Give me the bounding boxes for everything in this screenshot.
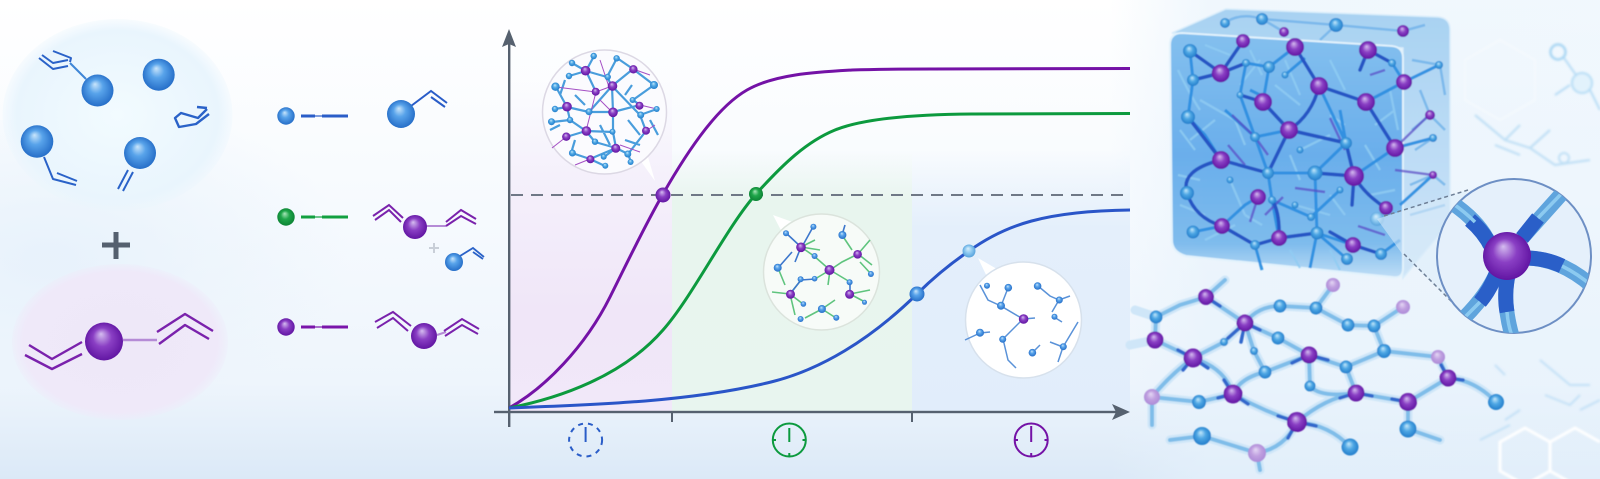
blue monomer cloud [2,19,232,211]
cube nodes: purple [1212,25,1437,253]
purple crosslinker [25,314,213,369]
curve markers [656,187,976,302]
legend row: blue monomer [277,91,447,128]
axes [494,29,1130,427]
cube strong links [1186,41,1395,254]
stage shading: green [672,150,912,411]
network nodes: blue [1150,300,1504,456]
decorative faint molecules [1465,40,1600,479]
purple crosslinker cloud [12,264,228,420]
panel: conversion chart [494,29,1130,456]
magnifier dashed leaders [1384,190,1468,312]
cube front face [1170,33,1403,277]
bubble: dense network [542,50,666,181]
cube side-visible far network [1225,16,1445,215]
hydrogel cube [1170,9,1450,278]
cube nodes: blue [1180,13,1443,265]
stage shading: blue [912,150,1130,411]
clock: green [773,424,806,456]
plus sign [102,232,130,259]
clock: purple [1015,424,1048,456]
bubble: sparse network [965,258,1082,378]
curve: purple [509,68,1130,408]
network nodes: purple [1146,289,1456,432]
cube focus node [1370,212,1384,226]
legend row: green mixture [277,205,484,271]
legend row: purple crosslinker [277,312,479,349]
network link halo [1130,280,1496,470]
stage shading: purple [509,80,672,411]
bubble: partial network [764,214,880,330]
curve: blue [509,210,1130,408]
magnifier [1377,179,1592,336]
cube mid blue links [1188,47,1439,270]
magnifier beam [1377,190,1467,310]
panel: legend [277,91,484,349]
cube thin pale links [1178,45,1398,270]
network nodes: pale purple [1144,278,1445,462]
blue monomers [21,51,209,191]
cube violet background links [1228,70,1433,235]
inset tubes and crosslink [1452,190,1592,336]
inset circle [1437,179,1591,333]
network links [1152,280,1496,470]
network dark tube segments [1178,297,1463,438]
panel: reactants [2,19,232,420]
lower network [1130,278,1504,470]
gel point dashed line [511,194,1130,196]
curve: green [509,114,1130,408]
cube top and side faces [1172,9,1450,278]
clock: blue dashed [569,424,602,456]
